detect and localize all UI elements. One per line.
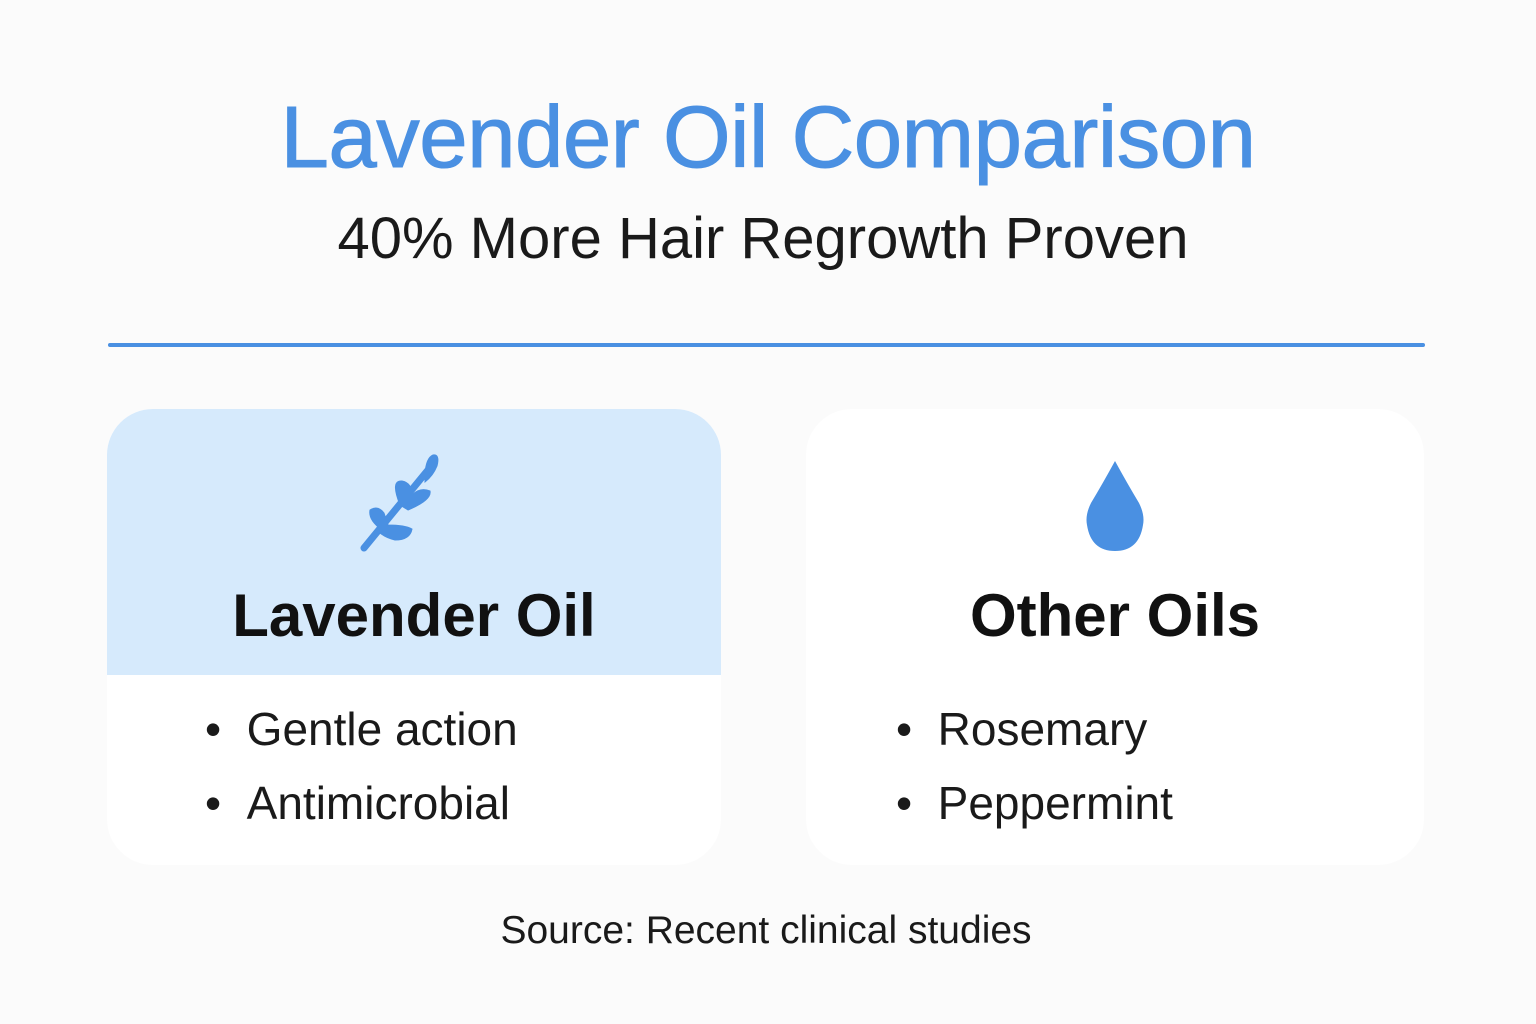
heading: lavender oil: Lavender Oil — [232, 582, 596, 649]
bullet list: other: • Peppermint — [896, 777, 1173, 829]
heading: other oils: Other Oils — [970, 582, 1260, 649]
bullet list: lavender — [205, 703, 518, 829]
source note: Source: Recent clinical studies — [500, 909, 1032, 952]
subtitle: 40% More Hair Regrowth Proven — [337, 206, 1189, 271]
panel: lavender oil — [107, 409, 721, 865]
bullet list: other — [896, 703, 1173, 829]
bullet list: other: • Rosemary — [896, 703, 1147, 755]
title: Lavender Oil Comparison — [280, 89, 1255, 186]
panel header background — [107, 409, 721, 675]
bullet list: lavender: • Antimicrobial — [205, 777, 510, 829]
icon: lavender sprig — [360, 454, 438, 552]
bullet list: lavender: • Gentle action — [205, 703, 518, 755]
icon: water drop — [1086, 461, 1144, 551]
panel: other oils — [806, 409, 1424, 865]
